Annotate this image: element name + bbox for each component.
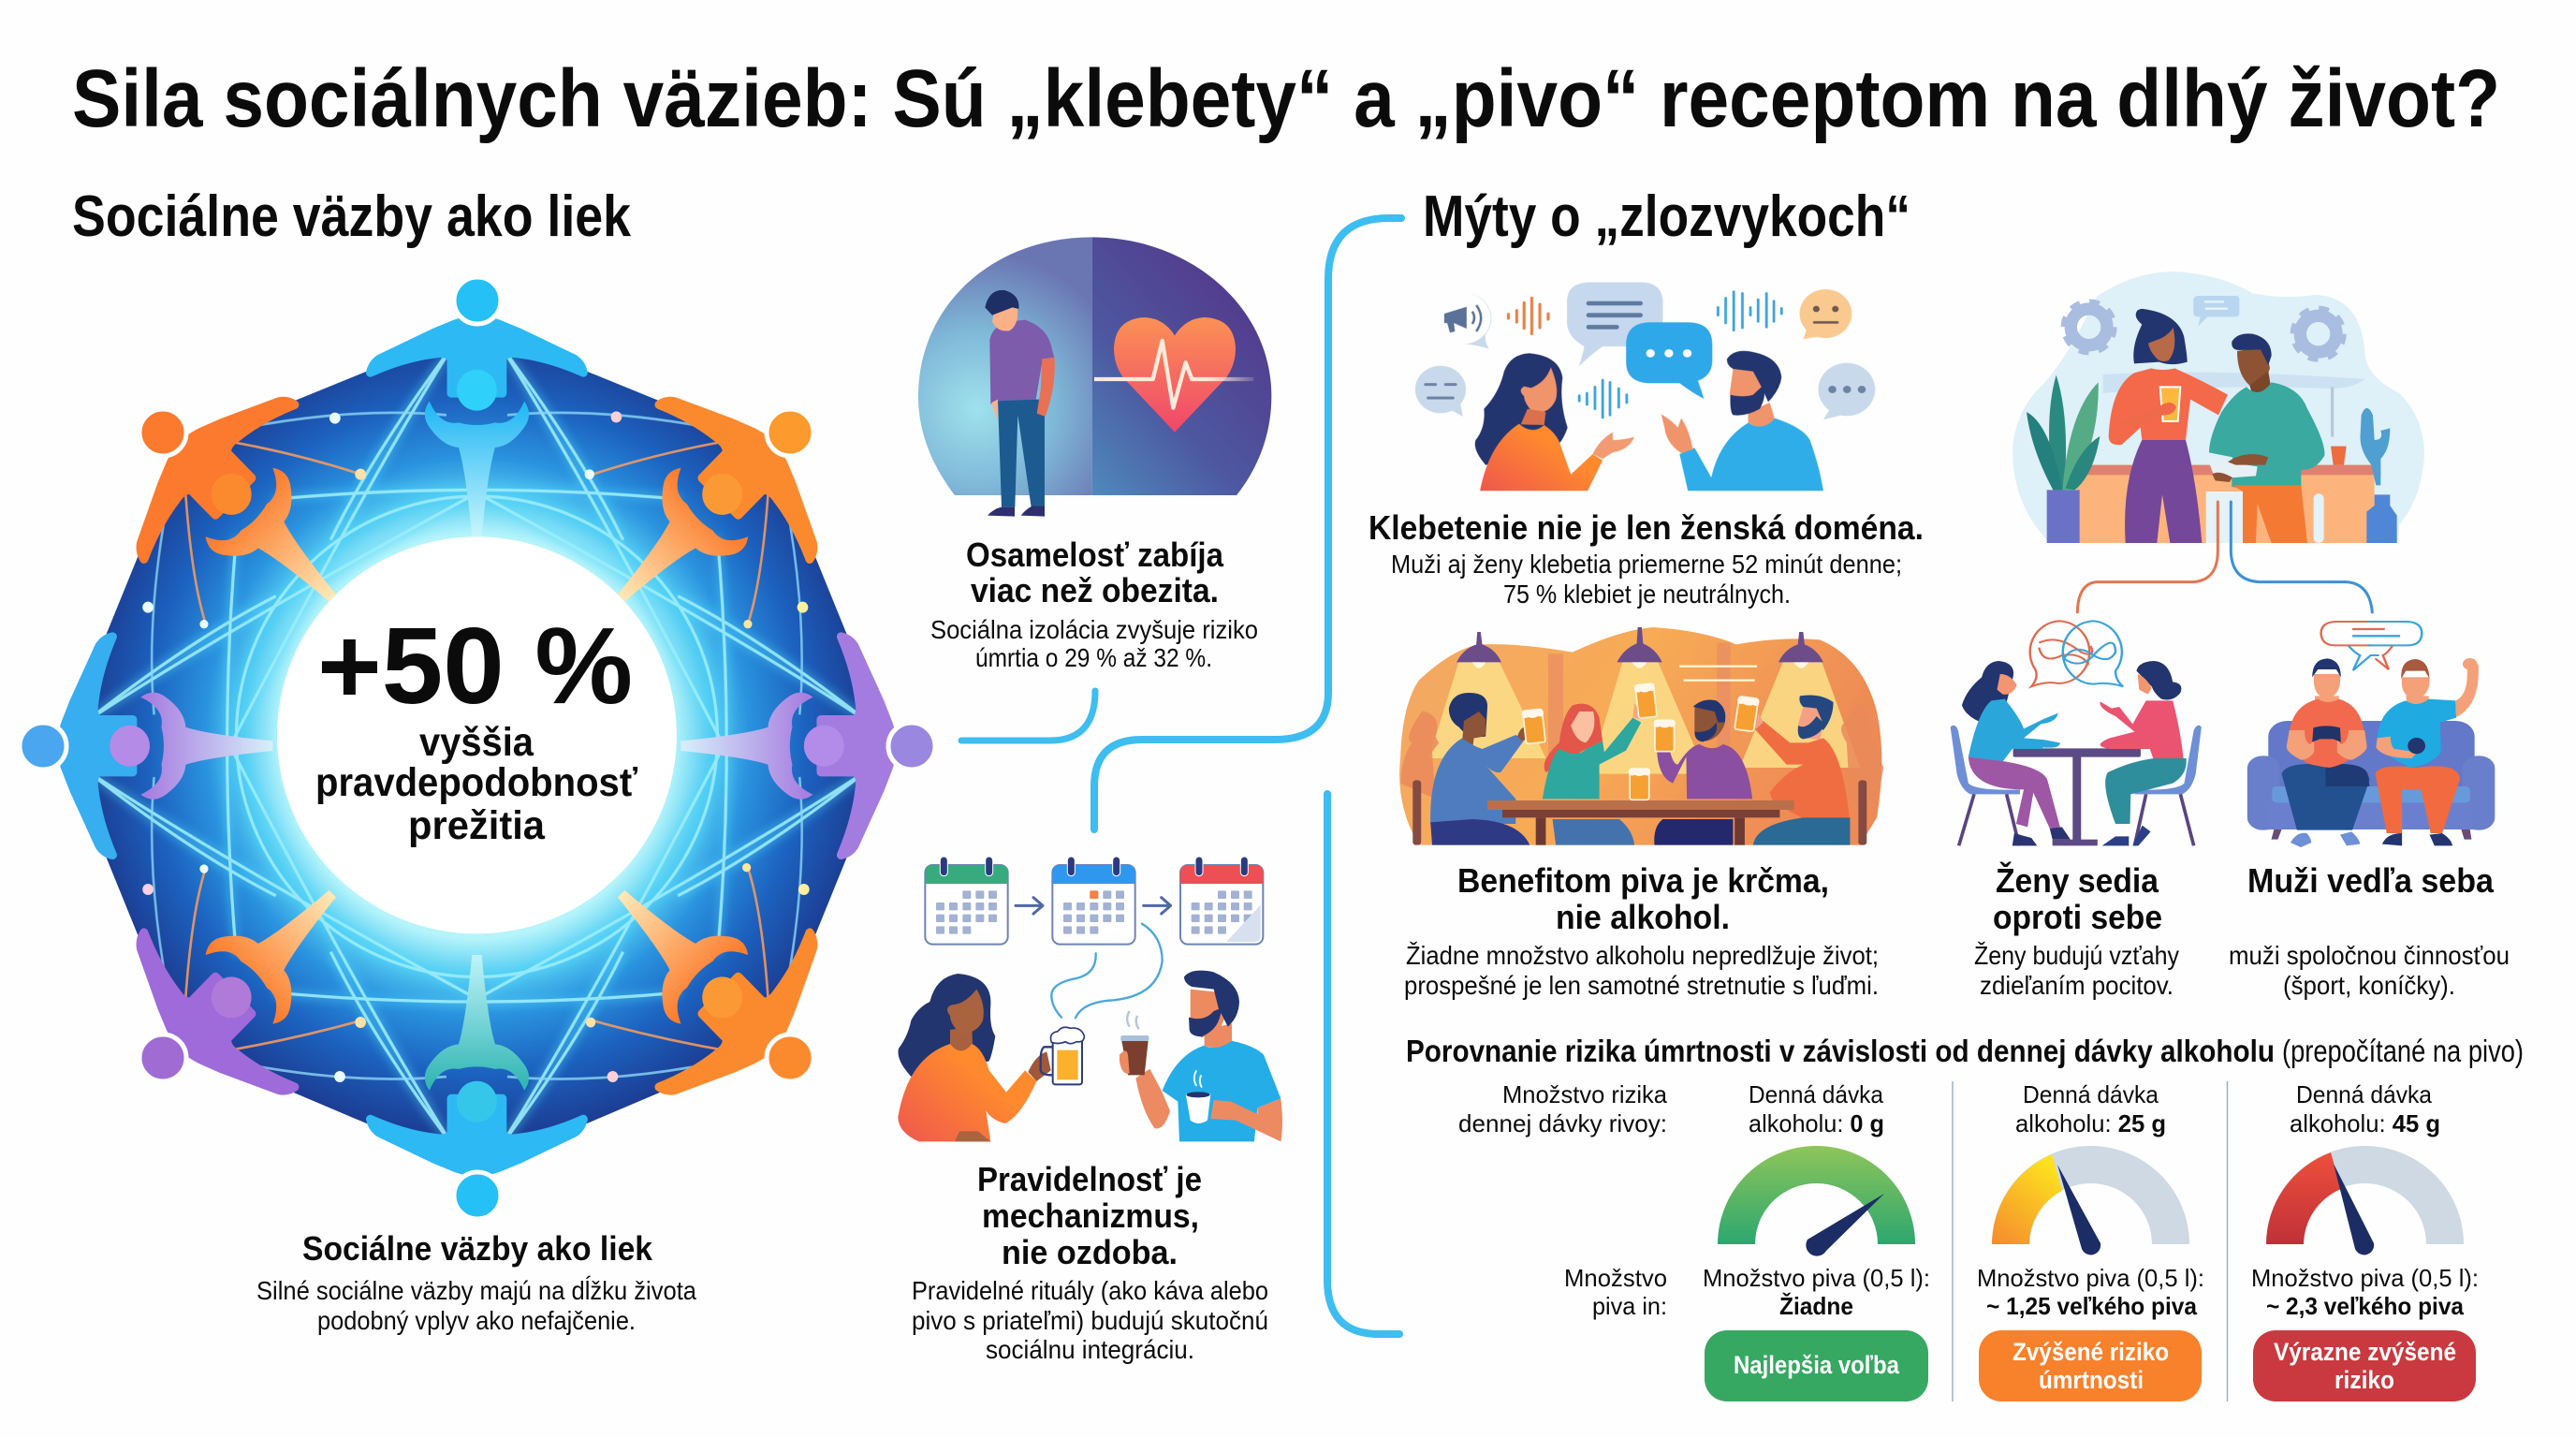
column: 25 g: alkoholu: 25 g xyxy=(2015,1109,2166,1137)
text: women: Ženy sedia xyxy=(1996,860,2159,900)
text: pub: Benefitom piva je krčma, xyxy=(1457,861,1829,900)
text: men: (šport, koníčky). xyxy=(2283,971,2455,1000)
person: left xyxy=(61,637,272,855)
person: upper right xyxy=(546,367,846,675)
row labels: Množstvo rizika xyxy=(1502,1080,1668,1108)
illustration: women face to face xyxy=(1951,621,2202,845)
badge: elevated risk: úmrtnosti xyxy=(2039,1366,2144,1394)
badge: best choice: Najlepšia voľba xyxy=(1734,1351,1900,1379)
gauge: 0 g xyxy=(1718,1146,1915,1256)
column: 45 g: Množstvo piva (0,5 l): xyxy=(2251,1264,2479,1292)
column: 25 g: Denná dávka xyxy=(2023,1080,2159,1108)
connector: loneliness to regularity xyxy=(961,691,1095,741)
beer mugs xyxy=(1521,682,1760,800)
woman xyxy=(1475,353,1634,491)
network octagon diagram xyxy=(20,277,935,1219)
column: 25 g: Množstvo piva (0,5 l): xyxy=(1977,1264,2204,1292)
text: gossip: 75 % klebiet je neutrálnych. xyxy=(1503,580,1791,609)
caption: social bonds: Silné sociálne väzby majú na dĺžku života xyxy=(256,1275,696,1305)
text: regularity: pivo s priateľmi) budujú skutočnú xyxy=(912,1306,1268,1335)
badge: elevated risk xyxy=(1979,1330,2202,1401)
text: loneliness: Osamelosť zabíja xyxy=(966,536,1224,574)
gauge: 25 g xyxy=(1992,1146,2189,1255)
illustration: man and woman at counter xyxy=(2012,271,2424,612)
text: pub xyxy=(1404,861,1879,1000)
stat label: vyššia xyxy=(419,720,534,765)
chairs xyxy=(1951,726,2202,845)
person 4 xyxy=(1751,695,1866,845)
illustration: calendars and two friends xyxy=(898,857,1282,1141)
curved links xyxy=(1051,924,1163,1018)
woman xyxy=(2109,309,2228,543)
comparison heading: (prepočítané na pivo) xyxy=(2282,1034,2524,1068)
man xyxy=(1661,351,1823,491)
plant xyxy=(2027,375,2100,543)
coffee cup xyxy=(1121,1041,1149,1075)
gauge: 45 g xyxy=(2266,1146,2464,1255)
badge: strongly elevated risk: riziko xyxy=(2334,1366,2394,1394)
stat number: +50 % xyxy=(317,605,633,726)
centre white circle xyxy=(277,536,677,933)
light cones xyxy=(1428,662,1860,774)
text: gossip xyxy=(1368,508,1924,609)
text: pub: Žiadne množstvo alkoholu nepredlžuje život; xyxy=(1406,941,1879,970)
man xyxy=(2207,333,2324,543)
badge: strongly elevated risk xyxy=(2253,1330,2476,1401)
branching connectors xyxy=(2077,502,2372,612)
column: 45 g: Denná dávka xyxy=(2296,1080,2432,1108)
person: lower left xyxy=(108,816,408,1124)
text: gossip: Klebetenie nie je len ženská doména. xyxy=(1368,508,1924,547)
person 1 xyxy=(1412,693,1530,845)
text: regularity: mechanizmus, xyxy=(982,1196,1199,1235)
text: regularity xyxy=(912,1160,1268,1364)
badge: elevated risk: Zvýšené riziko xyxy=(2012,1338,2169,1366)
tangled speech bubbles xyxy=(2030,621,2123,686)
person: lower right xyxy=(546,816,846,1124)
speech bubbles and icons xyxy=(1415,283,1875,419)
row labels: piva in: xyxy=(1592,1292,1667,1320)
text: regularity: Pravidelnosť je xyxy=(977,1160,1202,1198)
column: 45 g: ~ 2,3 veľkého piva xyxy=(2266,1292,2464,1320)
man right xyxy=(2376,658,2479,845)
cactus and items xyxy=(2360,408,2390,485)
column: 25 g xyxy=(1977,1080,2204,1401)
table xyxy=(1487,800,1794,845)
text: gossip: Muži aj ženy klebetia priemerne 52 minút denne; xyxy=(1391,550,1902,579)
woman xyxy=(898,974,1051,1141)
person: bottom xyxy=(371,955,583,1172)
woman left xyxy=(1962,661,2071,845)
text: women xyxy=(1974,860,2179,1000)
text: women: oproti sebe xyxy=(1993,898,2162,936)
text: men xyxy=(2229,861,2510,1000)
text: loneliness: úmrtia o 29 % až 32 %. xyxy=(975,643,1212,672)
column: 0 g: Žiadne xyxy=(1779,1292,1853,1320)
column: 45 g xyxy=(2251,1080,2479,1401)
man xyxy=(1120,971,1282,1141)
connector: bracket to myths xyxy=(1094,218,1401,829)
caption: social bonds xyxy=(256,1229,696,1335)
row labels: dennej dávky rivoy: xyxy=(1458,1109,1667,1137)
text: regularity: nie ozdoba. xyxy=(1002,1233,1178,1271)
column: 45 g: alkoholu: 45 g xyxy=(2290,1109,2440,1137)
column: 0 g: alkoholu: 0 g xyxy=(1749,1109,1884,1137)
background silhouettes xyxy=(1400,704,1883,805)
row labels: Množstvo xyxy=(1564,1264,1667,1292)
text: regularity: sociálnu integráciu. xyxy=(986,1335,1194,1364)
text: women: zdieľaním pocitov. xyxy=(1980,971,2174,1000)
text: women: Ženy budujú vzťahy xyxy=(1974,941,2179,970)
table xyxy=(2013,748,2141,845)
illustration: gossip conversation xyxy=(1415,283,1875,491)
text: pub: prospešné je len samotné stretnutie s ľuďmi. xyxy=(1404,971,1879,1000)
lamps xyxy=(1456,627,1823,668)
badge: strongly elevated risk: Výrazne zvýšené xyxy=(2274,1338,2456,1366)
counter xyxy=(2076,465,2375,543)
person 3 xyxy=(1654,699,1752,845)
column dividers xyxy=(1953,1081,2228,1401)
shared bubble xyxy=(2321,622,2422,670)
text: loneliness: viac než obezita. xyxy=(971,571,1219,609)
illustration: lonely man and heart xyxy=(918,237,1271,517)
column: 0 g: Množstvo piva (0,5 l): xyxy=(1703,1264,1930,1292)
centre stat: prežitia xyxy=(408,803,546,848)
outer dots xyxy=(20,277,935,1219)
heading: myths: Mýty o „zlozvykoch“ xyxy=(1423,184,1910,249)
calendars xyxy=(925,857,1263,945)
caption: social bonds: Sociálne väzby ako liek xyxy=(302,1229,653,1268)
sofa xyxy=(2247,721,2495,840)
centre stat xyxy=(315,605,637,848)
person: right xyxy=(681,637,892,855)
column: 0 g xyxy=(1703,1080,1930,1401)
caption: social bonds: podobný vplyv ako nefajčenie. xyxy=(317,1306,636,1335)
centre stat: pravdepodobnosť xyxy=(315,760,637,805)
beer mug xyxy=(1041,1027,1084,1084)
connector: lower bracket xyxy=(1327,794,1399,1334)
illustration: pub scene xyxy=(1399,627,1883,845)
text: pub: nie alkohol. xyxy=(1556,898,1730,936)
man left xyxy=(2282,658,2369,847)
woman right xyxy=(2100,661,2187,845)
person 2 xyxy=(1543,704,1643,845)
glowing nodes xyxy=(142,411,810,1082)
column: 25 g: ~ 1,25 veľkého piva xyxy=(1986,1292,2198,1320)
text: loneliness: Sociálna izolácia zvyšuje riziko xyxy=(930,615,1258,644)
text: men: muži spoločnou činnosťou xyxy=(2229,941,2510,970)
text: men: Muži vedľa seba xyxy=(2247,861,2495,900)
person: top xyxy=(371,320,583,536)
heading: social bonds: Sociálne väzby ako liek xyxy=(72,184,631,249)
gears xyxy=(2064,302,2343,359)
arrows xyxy=(1016,898,1171,914)
badge: best choice xyxy=(1705,1330,1928,1401)
column: 0 g: Denná dávka xyxy=(1749,1080,1883,1108)
illustration: men side by side xyxy=(2247,622,2495,847)
row labels xyxy=(1458,1080,1668,1320)
connection lines xyxy=(87,346,867,1145)
text: regularity: Pravidelné rituály (ako káva alebo xyxy=(912,1276,1268,1305)
comparison heading: Porovnanie rizika úmrtnosti v závislosti od dennej dávky alkoholu xyxy=(1406,1034,2275,1068)
octagon background xyxy=(61,327,892,1170)
text: loneliness xyxy=(930,536,1258,672)
person: upper left xyxy=(108,367,408,675)
